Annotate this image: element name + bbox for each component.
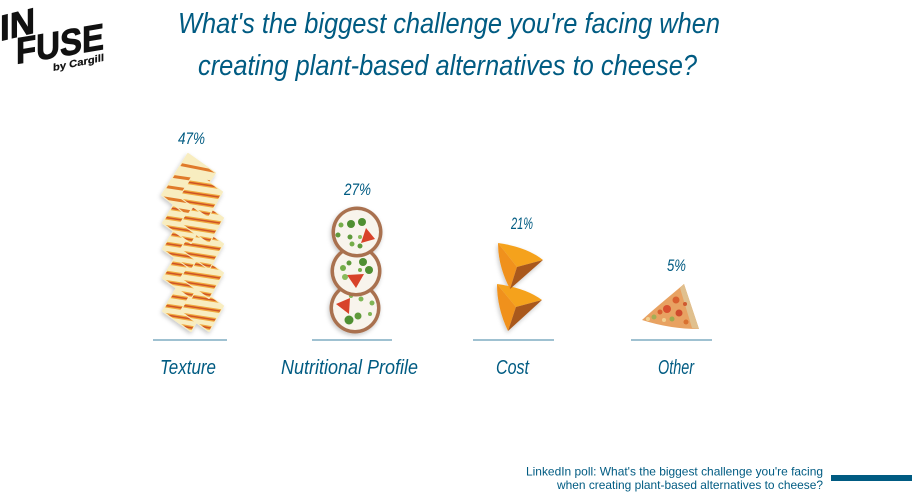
halloumi back piece — [158, 154, 218, 215]
pictogram: pizza slice for Other — [642, 284, 699, 329]
label: Nutritional Profile: Nutritional Profile — [281, 357, 418, 379]
axis line: Texture — [153, 340, 227, 341]
pictogram: cream cheese crackers for Nutritional Profile — [330, 206, 382, 334]
title: What's the biggest challenge you're facing when — [178, 8, 720, 40]
value: 21%: 21% — [510, 214, 533, 233]
pumpkin wedge 1 — [498, 243, 543, 289]
label: Other: Other — [658, 357, 695, 379]
cracker 2 — [330, 246, 382, 296]
axis line: Nutritional Profile — [312, 340, 392, 341]
pictogram: pumpkin wedges for Cost — [497, 243, 543, 331]
label: Cost: Cost — [496, 357, 530, 379]
title — [178, 8, 720, 82]
value: 47%: 47% — [178, 129, 205, 148]
pictogram: halloumi stack for Texture — [158, 154, 226, 331]
axis line: Other — [631, 340, 712, 341]
cracker 3 — [330, 282, 380, 334]
label: Texture: Texture — [160, 357, 216, 379]
logo: Infuse by Cargill: IN — [0, 0, 35, 49]
logo: Infuse by Cargill: by Cargill — [53, 53, 104, 74]
value: 27%: 27% — [343, 180, 371, 199]
axis line: Cost — [473, 340, 554, 341]
pumpkin wedge 2 — [497, 284, 542, 331]
title: creating plant-based alternatives to cheese? — [198, 50, 698, 82]
footer source note — [526, 464, 823, 492]
footer source note: when creating plant-based alternatives to cheese? — [556, 478, 823, 492]
footer accent bar — [831, 475, 912, 481]
cracker 1 — [332, 206, 382, 258]
logo: Infuse by Cargill: FUSE — [16, 15, 104, 72]
logo: Infuse by Cargill — [0, 0, 104, 74]
footer source note: LinkedIn poll: What's the biggest challenge you're facing — [526, 464, 823, 478]
value: 5%: 5% — [667, 256, 686, 275]
